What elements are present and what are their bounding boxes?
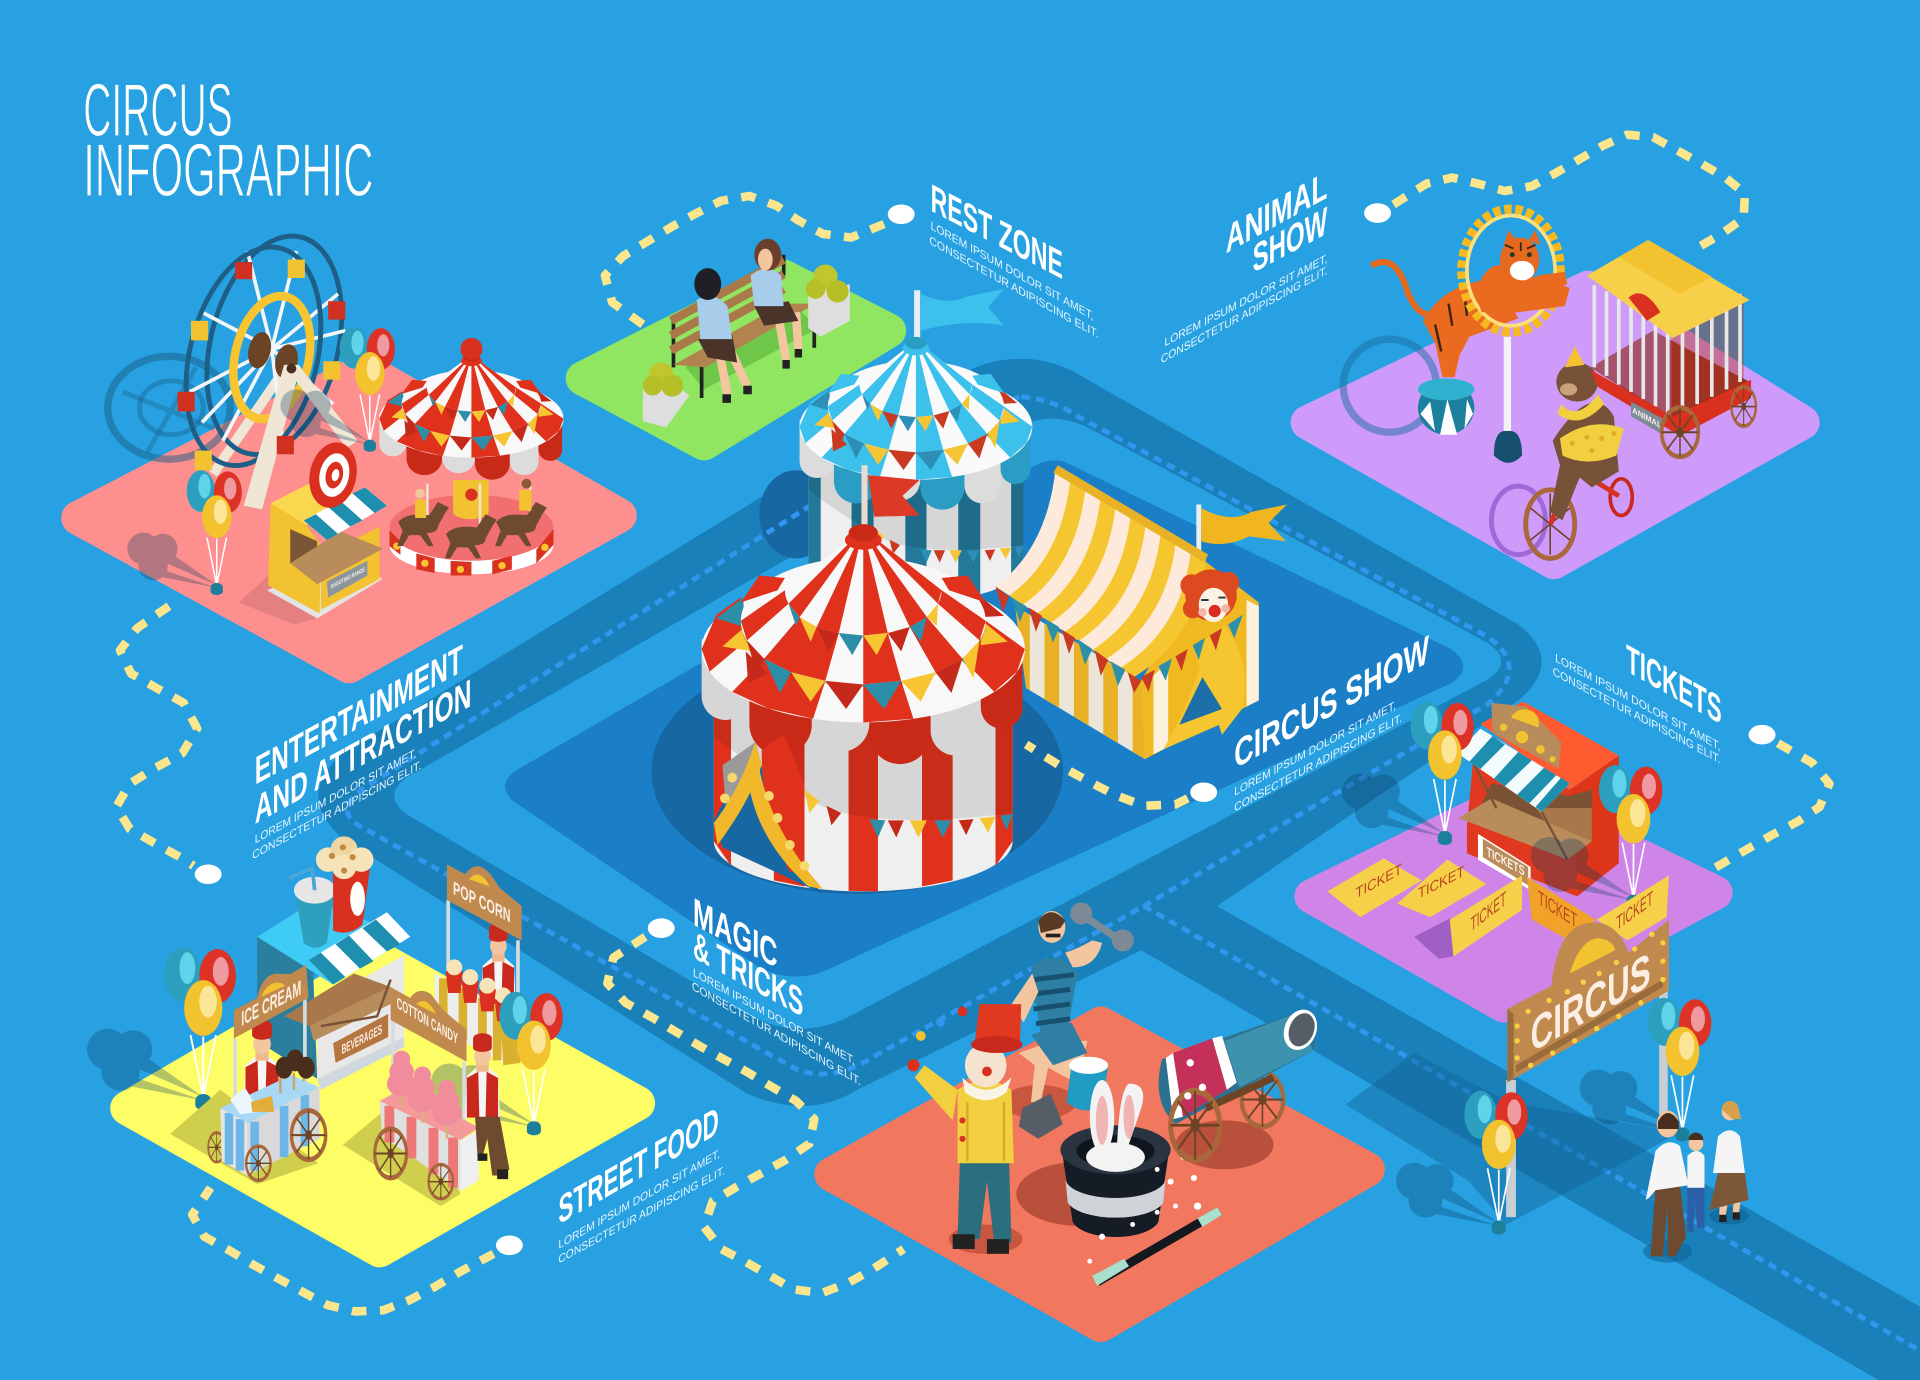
heading: circus show — [1234, 626, 1429, 815]
dashed route: circus show — [1026, 744, 1217, 806]
heading: tickets: TICKETS — [1626, 636, 1722, 733]
heading: circus show: LOREM IPSUM DOLOR SIT AMET, — [1234, 698, 1396, 799]
icon: carousel — [379, 338, 564, 576]
icon: red big top tent — [702, 465, 1025, 894]
heading: circus show: CONSECTETUR ADIPISCING ELIT. — [1234, 711, 1402, 815]
icon: pop corn stand: POP CORN — [453, 878, 511, 927]
heading: entertainment and attraction: ENTERTAINMENT — [255, 635, 463, 793]
dashed route: entertainment — [116, 606, 222, 884]
heading: animal show: LOREM IPSUM DOLOR SIT AMET, — [1164, 252, 1327, 349]
heading: entertainment and attraction: CONSECTETUR ADIPISCING ELIT. — [252, 758, 421, 862]
panel: rest zone plate — [583, 277, 889, 443]
heading: entertainment and attraction: LOREM IPSUM DOLOR SIT AMET, — [255, 746, 416, 846]
icon: shooting range stall: SHOOTING RANGE — [331, 566, 365, 591]
icon: magic wand — [1092, 1207, 1222, 1286]
icon: entrance gate shadow — [1346, 1053, 1680, 1224]
icon: tickets pile: TICKET — [1418, 863, 1465, 903]
heading: animal show: ANIMAL — [1226, 162, 1327, 262]
dashed route: street food — [192, 1188, 523, 1311]
panel: street food plate — [127, 960, 638, 1250]
icon: cotton candy cart: COTTON CANDY — [397, 993, 458, 1048]
icon: balloons street food left — [87, 948, 236, 1110]
heading: entertainment and attraction: AND ATTRACTION — [255, 670, 471, 832]
icon: stunt cannon — [1159, 1005, 1323, 1169]
icon: balloons gate left — [1396, 1091, 1528, 1235]
icon: tickets pile: TICKET — [1538, 886, 1577, 933]
icon: circus entrance gate: CIRCUS — [1531, 941, 1651, 1063]
icon: strongman with dumbbell — [1003, 902, 1134, 1139]
heading: street food: LOREM IPSUM DOLOR SIT AMET, — [558, 1147, 720, 1252]
title: CIRCUS — [83, 68, 233, 152]
icon: animal cage wagon — [1587, 240, 1756, 457]
icon: ticket booth: TICKETS — [1487, 845, 1525, 880]
icon: central food kiosk: BEVERAGES — [342, 1022, 382, 1058]
heading: street food: STREET FOOD — [558, 1098, 719, 1233]
panel: magic and tricks plate — [831, 1024, 1368, 1325]
icon: animal cage wagon: ANIMAL — [1632, 405, 1662, 431]
heading: tickets: LOREM IPSUM DOLOR SIT AMET, — [1555, 651, 1720, 753]
icon: ice cream cart: ICE CREAM — [241, 976, 301, 1031]
icon: cotton candy cart — [343, 987, 509, 1206]
panel: entertainment plate — [78, 370, 620, 666]
heading: rest zone: CONSECTETUR ADIPISCING ELIT. — [929, 233, 1098, 341]
heading: magic and tricks: CONSECTETUR ADIPISCING ELIT. — [692, 979, 861, 1088]
icon: tickets pile: TICKET — [1471, 887, 1506, 936]
icon: ice cream cart — [170, 965, 326, 1184]
dashed route: tickets — [1714, 725, 1829, 868]
heading: animal show: CONSECTETUR ADIPISCING ELIT. — [1161, 263, 1327, 366]
heading: magic and tricks: LOREM IPSUM DOLOR SIT AMET, — [693, 966, 855, 1068]
icon: ferris wheel — [108, 222, 363, 509]
icon: ticket booth — [1457, 702, 1619, 896]
icon: magic hat with rabbit — [1016, 1080, 1201, 1264]
icon: balloons by ferris wheel — [280, 327, 395, 452]
heading: tickets: CONSECTETUR ADIPISCING ELIT. — [1553, 664, 1720, 766]
icon: tickets pile: TICKET — [1356, 861, 1402, 903]
icon: blue circus tent — [800, 289, 1032, 601]
icon: balloons street food right — [431, 992, 563, 1135]
heading: circus show: CIRCUS SHOW — [1234, 626, 1429, 777]
heading: magic and tricks: & TRICKS — [693, 922, 803, 1025]
icon: balloons tickets right — [1531, 765, 1662, 909]
heading: animal show: SHOW — [1253, 198, 1328, 281]
heading: rest zone: LOREM IPSUM DOLOR SIT AMET, — [931, 219, 1093, 323]
icon: tiger jumping through ring of fire — [1343, 209, 1570, 463]
heading: magic and tricks — [692, 889, 861, 1088]
dashed route: rest zone — [605, 196, 915, 324]
dashed route: magic and tricks — [607, 918, 904, 1293]
heading: entertainment and attraction — [252, 635, 471, 862]
panel: tickets plate — [1311, 796, 1716, 1005]
icon: pop corn stand — [435, 864, 522, 1065]
icon: central food kiosk — [257, 836, 410, 1090]
heading: street food: CONSECTETUR ADIPISCING ELIT. — [558, 1163, 725, 1266]
heading: magic and tricks: MAGIC — [693, 889, 778, 977]
title — [83, 68, 373, 212]
icon: tickets pile: TICKET — [1616, 886, 1653, 935]
panel: animal show plate — [1308, 288, 1802, 562]
heading: street food — [558, 1098, 725, 1266]
icon: balloons front left — [127, 470, 242, 595]
icon: tickets pile — [1327, 858, 1669, 959]
icon: balloons tickets left — [1342, 702, 1474, 845]
circular road around the tents — [318, 359, 1920, 1380]
icon: bench with two women — [643, 239, 850, 427]
dashed route: animal show — [1364, 135, 1745, 249]
title: INFOGRAPHIC — [83, 128, 373, 212]
heading: animal show — [1161, 162, 1328, 366]
icon: juggling clown — [907, 1004, 1022, 1254]
icon: circus entrance gate — [1506, 920, 1711, 1217]
heading: rest zone: REST ZONE — [931, 175, 1063, 288]
icon: shooting range stall — [239, 438, 387, 624]
icon: yellow striped tent — [996, 469, 1287, 771]
icon: bear on unicycle — [1491, 347, 1632, 558]
icon: family walking to gate — [1643, 1101, 1749, 1262]
